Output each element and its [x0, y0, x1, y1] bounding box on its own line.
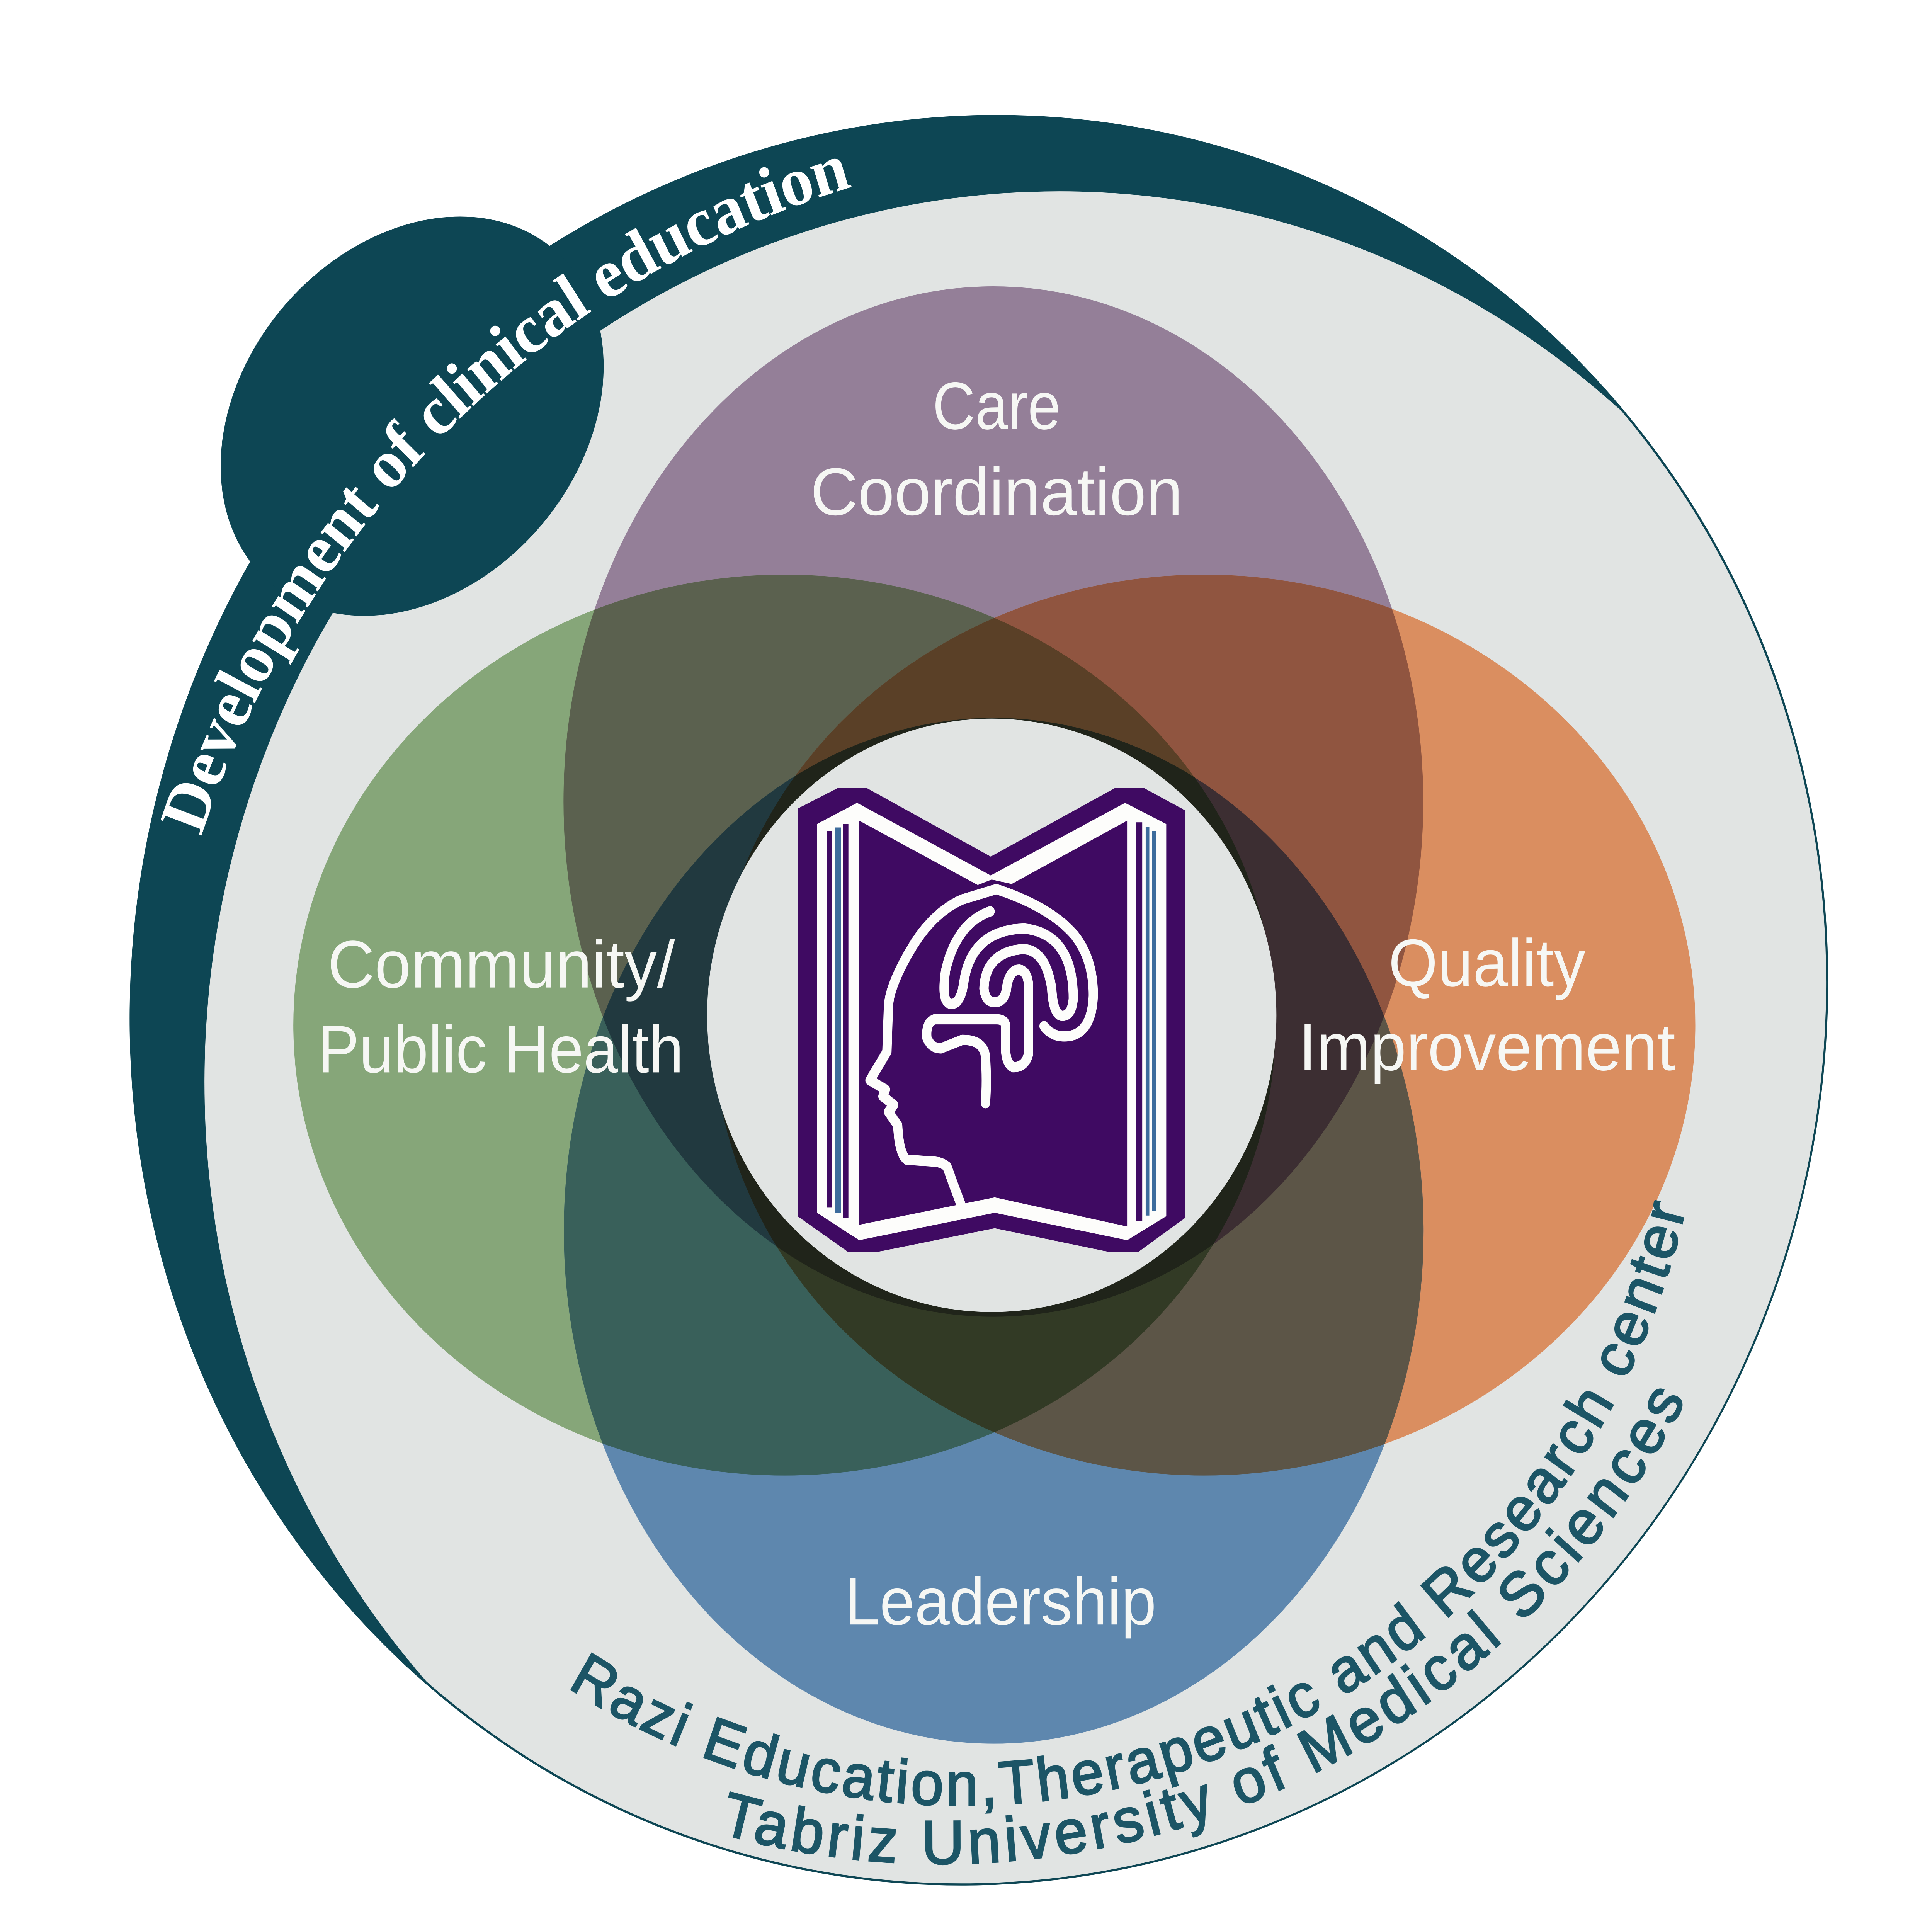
label: Leadership: Leadership	[845, 1564, 1156, 1639]
petal: quality improvement	[713, 575, 1695, 1476]
curved text: university name: Tabriz University of Medical Sciences	[716, 1372, 1697, 1877]
heading: Development of clinical education: Development of clinical education	[146, 128, 857, 842]
centre grey circle	[707, 719, 1276, 1312]
label: Quality Improvement: Improvement	[1299, 1010, 1675, 1085]
label: Quality Improvement: Quality	[1388, 926, 1585, 1001]
petal: community public health	[293, 575, 1276, 1476]
overlap: community, quality, leadership	[564, 718, 1423, 1744]
overlap: care and quality	[796, 575, 1423, 1016]
label: Care Coordination: Coordination	[811, 454, 1183, 529]
overlap: care, community, quality	[713, 575, 1695, 1476]
overlap: care and community	[563, 575, 995, 1017]
label: Community/Public Health: Community/	[328, 927, 675, 1002]
curved text: centre name: Razi Education,Therapeutic and Research center	[561, 1194, 1698, 1818]
venn diagram	[293, 286, 1695, 1744]
label: Community/Public Health: Public Health	[318, 1012, 684, 1087]
overlap: all four	[564, 718, 1423, 1744]
label: Care Coordination	[811, 369, 1183, 529]
petal: care coordination	[563, 286, 1423, 1317]
petal: leadership	[564, 718, 1423, 1744]
inner grey disc	[204, 191, 1914, 1932]
overlap: care, community, leadership	[564, 718, 1423, 1744]
icon: book and head logo	[798, 788, 1185, 1252]
label: Quality Improvement	[1299, 926, 1675, 1085]
label: Community/Public Health	[318, 927, 684, 1087]
overlap: quality and leadership	[564, 718, 1423, 1744]
overlap: care, quality, leadership	[564, 718, 1423, 1744]
teal blob behind heading	[221, 217, 604, 616]
label: Care Coordination: Care	[932, 369, 1061, 444]
overlap: community and leadership	[564, 777, 995, 1476]
